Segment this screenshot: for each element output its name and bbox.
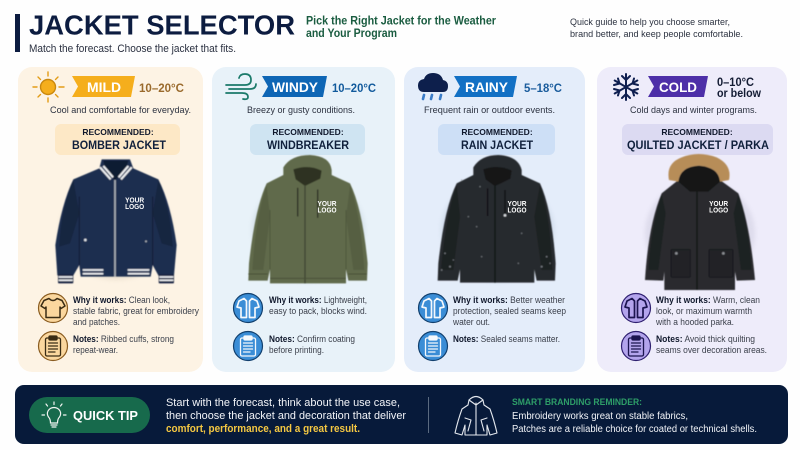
icon: light bulb: [42, 402, 66, 427]
parka illustration: YOUR: [709, 199, 729, 208]
rainy badge: RAINY: [465, 79, 509, 95]
smart branding reminder: Embroidery works great on stable fabrics,: [512, 411, 688, 422]
windy description: Breezy or gusty conditions.: [247, 105, 355, 116]
cold why it works: with a hooded parka.: [655, 317, 734, 327]
cold why it works: [622, 294, 760, 327]
smart branding reminder: Patches are a reliable choice for coated or technical shells.: [512, 424, 757, 435]
bomber jacket illustration: LOGO: [125, 202, 144, 211]
green headline: Pick the Right Jacket for the Weather: [306, 16, 496, 28]
cold why it works: look, or maximum warmth: [656, 306, 752, 316]
mild notes: Notes: Ribbed cuffs, strong: [73, 334, 174, 344]
rain jacket illustration: YOUR: [507, 199, 527, 208]
panel: cold: [597, 67, 787, 372]
windbreaker illustration: YOUR: [317, 199, 337, 208]
mild card background: [18, 67, 203, 372]
tip text: comfort, performance, and a great result.: [166, 423, 360, 435]
windy notes: before printing.: [269, 345, 324, 355]
intro text: [570, 17, 743, 40]
mild recommendation: BOMBER JACKET: [72, 140, 166, 152]
icon: snowflake: [614, 74, 638, 100]
green headline: and Your Program: [306, 28, 397, 40]
windy why it works: easy to pack, blocks wind.: [269, 306, 367, 316]
rainy why it works: water out.: [452, 317, 490, 327]
icon: jacket: [418, 294, 448, 322]
tip text: Start with the forecast, think about the use case,: [166, 397, 400, 409]
cold temperature: or below: [717, 88, 761, 100]
icon: clipboard: [418, 332, 448, 360]
quick tip pill: QUICK TIP: [73, 408, 138, 423]
mild why it works: and patches.: [73, 317, 120, 327]
windy badge: WINDY: [272, 79, 319, 95]
icon: wind: [226, 74, 256, 99]
mild notes: repeat-wear.: [73, 345, 118, 355]
cold notes: [622, 332, 767, 360]
rainy badge: [454, 76, 517, 97]
smart branding reminder: [512, 397, 757, 435]
icon: jacket: [622, 294, 650, 322]
mild temperature: 10–20°C: [139, 83, 184, 95]
rainy description: Frequent rain or outdoor events.: [424, 105, 555, 116]
windbreaker illustration: LOGO: [317, 205, 337, 214]
rainy recommendation: RAIN JACKET: [461, 140, 533, 152]
cold recommendation: RECOMMENDED:: [661, 127, 733, 137]
mild badge: [72, 76, 135, 97]
cold recommendation: [622, 124, 773, 155]
rainy recommendation: RECOMMENDED:: [461, 127, 533, 137]
smart branding reminder: SMART BRANDING REMINDER:: [512, 397, 642, 408]
rainy why it works: [418, 294, 566, 327]
mild notes: [38, 332, 174, 360]
cold card background: [597, 67, 787, 372]
panel: windy: [212, 67, 395, 372]
panel: rainy: [404, 67, 585, 372]
icon: sun: [33, 72, 64, 102]
header: [15, 10, 743, 55]
intro text: Quick guide to help you choose smarter,: [570, 17, 730, 28]
mild recommendation: RECOMMENDED:: [82, 127, 154, 137]
cold badge: [648, 76, 708, 97]
windy notes: Notes: Confirm coating: [269, 334, 355, 344]
windy recommendation: [250, 124, 365, 155]
mild why it works: Why it works: Clean look,: [73, 295, 170, 305]
rain jacket illustration: LOGO: [507, 205, 527, 214]
windy recommendation: RECOMMENDED:: [272, 127, 344, 137]
bomber jacket illustration: [55, 159, 177, 283]
subtitle: Match the forecast. Choose the jacket that fits.: [29, 43, 236, 55]
windy temperature: 10–20°C: [332, 83, 376, 95]
intro text: brand better, and keep people comfortable.: [570, 29, 743, 40]
mild recommendation: [55, 124, 180, 155]
windy recommendation: WINDBREAKER: [267, 140, 350, 152]
cold notes: Notes: Avoid thick quilting: [656, 334, 755, 344]
mild why it works: [38, 294, 199, 327]
mild description: Cool and comfortable for everyday.: [50, 105, 191, 116]
parka illustration: LOGO: [709, 205, 728, 214]
rainy why it works: Why it works: Better weather: [453, 295, 565, 305]
quick tip banner: [15, 385, 788, 444]
windy badge: [262, 76, 327, 97]
cold recommendation: QUILTED JACKET / PARKA: [627, 140, 769, 152]
cold description: Cold days and winter programs.: [630, 105, 757, 116]
icon: clipboard: [38, 332, 68, 360]
rainy card background: [404, 67, 585, 372]
panel: mild: [18, 67, 203, 372]
cold temperature: 0–10°C: [717, 77, 754, 89]
icon: tee: [38, 294, 68, 322]
cold badge: COLD: [659, 79, 697, 95]
parka illustration: [645, 154, 755, 290]
icon: rain cloud: [418, 73, 448, 99]
title accent bar: [15, 14, 20, 52]
rainy why it works: protection, sealed seams keep: [453, 306, 566, 316]
mild badge: MILD: [87, 79, 121, 95]
icon: clipboard: [622, 332, 650, 360]
icon: clipboard: [234, 332, 262, 360]
windbreaker illustration: [248, 155, 368, 283]
windy why it works: Why it works: Lightweight,: [269, 295, 367, 305]
rainy temperature: 5–18°C: [524, 83, 562, 95]
cold temperature: [717, 77, 761, 100]
tip text: then choose the jacket and decoration that deliver: [166, 410, 406, 422]
icon: jacket: [234, 294, 262, 322]
bomber jacket illustration: YOUR: [125, 196, 145, 205]
cold notes: seams over decoration areas.: [656, 345, 767, 355]
rainy notes: Notes: Sealed seams matter.: [453, 334, 560, 344]
rain jacket illustration: [438, 155, 556, 283]
icon: jacket outline: [455, 396, 497, 435]
windy why it works: [234, 294, 367, 322]
banner background: [15, 385, 788, 444]
rainy notes: [418, 332, 560, 360]
green headline: [306, 16, 496, 40]
quick tip pill: [29, 397, 150, 433]
mild why it works: stable fabric, great for embroidery: [73, 306, 199, 316]
rainy recommendation: [438, 124, 555, 155]
windy notes: [234, 332, 355, 360]
cold why it works: Why it works: Warm, clean: [656, 295, 760, 305]
title: JACKET SELECTOR: [29, 10, 295, 40]
windy card background: [212, 67, 395, 372]
tip text: [166, 397, 406, 435]
